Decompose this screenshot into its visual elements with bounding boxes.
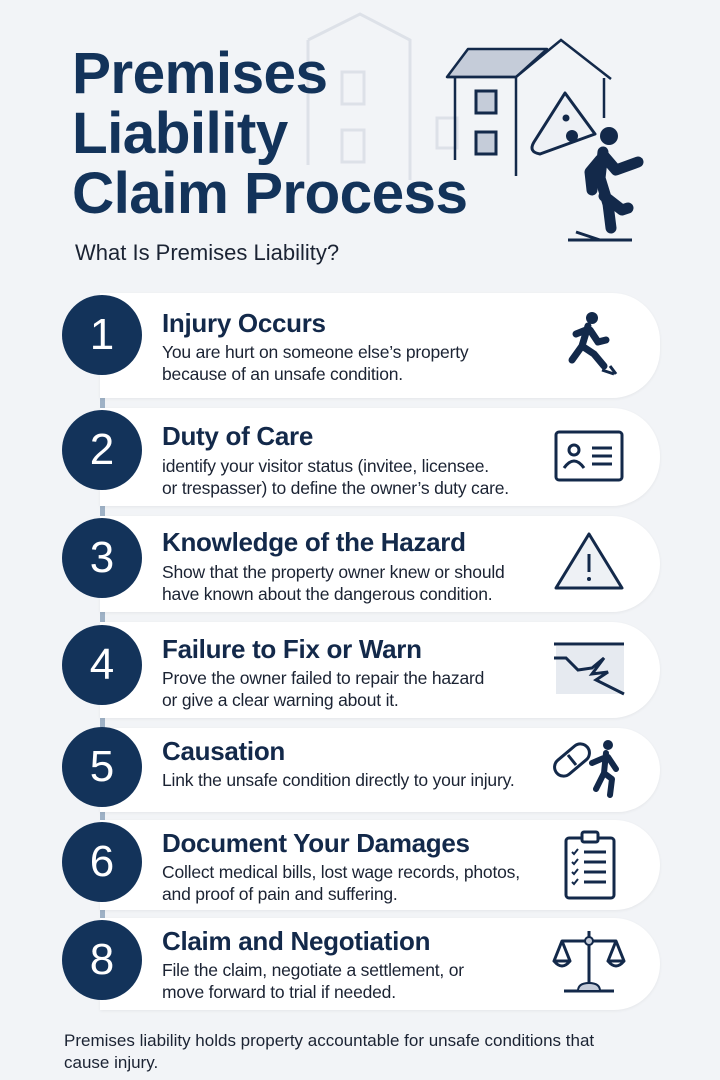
step 8 title: Claim and Negotiation bbox=[162, 926, 430, 956]
step 4 number: 4 bbox=[90, 640, 114, 689]
step 5 number: 5 bbox=[90, 742, 114, 791]
step 6 number bbox=[62, 822, 142, 902]
background house illustration bbox=[306, 12, 458, 180]
step 5 title: Causation bbox=[162, 736, 285, 766]
step 5 text: Link the unsafe condition directly to your injury. bbox=[162, 770, 515, 790]
step 3 number bbox=[62, 518, 142, 598]
step 2 text: identify your visitor status (invitee, licensee. bbox=[162, 456, 489, 476]
icon: ID card bbox=[554, 430, 624, 482]
step 2 number: 2 bbox=[90, 425, 114, 474]
step 6 card bbox=[100, 820, 660, 910]
step 4 text: Prove the owner failed to repair the hazard bbox=[162, 668, 484, 688]
step 3 text: Show that the property owner knew or should bbox=[162, 562, 505, 582]
step 1 text: because of an unsafe condition. bbox=[162, 364, 403, 384]
step 3 number: 3 bbox=[90, 533, 114, 582]
step 4 card bbox=[100, 622, 660, 718]
step 1 card bbox=[100, 293, 660, 398]
step 8 number bbox=[62, 920, 142, 1000]
title: Liability bbox=[72, 101, 288, 166]
step 2 text: or trespasser) to define the owner’s duty care. bbox=[162, 478, 509, 498]
step 1 text bbox=[162, 342, 469, 384]
hero illustration: house, warning sign, falling person bbox=[446, 38, 644, 242]
step 4 title: Failure to Fix or Warn bbox=[162, 634, 422, 664]
subtitle: What Is Premises Liability? bbox=[75, 240, 339, 265]
icon: cracked floor bbox=[554, 642, 625, 696]
icon: running person bbox=[568, 312, 618, 376]
step 6 text: and proof of pain and suffering. bbox=[162, 884, 398, 904]
step 6 number: 6 bbox=[90, 837, 114, 886]
step 2 title: Duty of Care bbox=[162, 421, 313, 451]
step 4 text: or give a clear warning about it. bbox=[162, 690, 399, 710]
icon: warning triangle bbox=[554, 532, 624, 590]
step 6 text: Collect medical bills, lost wage records, photos, bbox=[162, 862, 520, 882]
step 5 card bbox=[100, 728, 660, 812]
step 5 number bbox=[62, 727, 142, 807]
step 2 card bbox=[100, 408, 660, 506]
title: Premises bbox=[72, 41, 327, 106]
icon: scales of justice bbox=[552, 931, 626, 992]
timeline line bbox=[100, 330, 105, 970]
step 4 text bbox=[162, 668, 484, 710]
title: Claim Process bbox=[72, 161, 467, 226]
step 1 number bbox=[62, 295, 142, 375]
step 3 title: Knowledge of the Hazard bbox=[162, 527, 466, 557]
step 6 text bbox=[162, 862, 520, 904]
step 2 number bbox=[62, 410, 142, 490]
icon: clipboard checklist bbox=[564, 830, 616, 900]
step 1 text: You are hurt on someone else’s property bbox=[162, 342, 468, 362]
step 4 number bbox=[62, 625, 142, 705]
step 8 text: File the claim, negotiate a settlement, or bbox=[162, 960, 464, 980]
step 1 number: 1 bbox=[90, 310, 114, 359]
step 1 title: Injury Occurs bbox=[162, 308, 326, 338]
icon: bandage and falling person bbox=[553, 740, 619, 798]
title bbox=[72, 41, 467, 226]
step 3 text bbox=[162, 562, 505, 604]
step 2 text bbox=[162, 456, 509, 498]
step 8 card bbox=[100, 918, 660, 1010]
step 8 text: move forward to trial if needed. bbox=[162, 982, 396, 1002]
step 3 text: have known about the dangerous condition. bbox=[162, 584, 492, 604]
step 6 title: Document Your Damages bbox=[162, 828, 470, 858]
step 3 card bbox=[100, 516, 660, 612]
step 8 number: 8 bbox=[90, 935, 114, 984]
step 8 text bbox=[162, 960, 464, 1002]
footer text: Premises liability holds property accountable for unsafe conditions that cause injury. bbox=[64, 1031, 594, 1072]
